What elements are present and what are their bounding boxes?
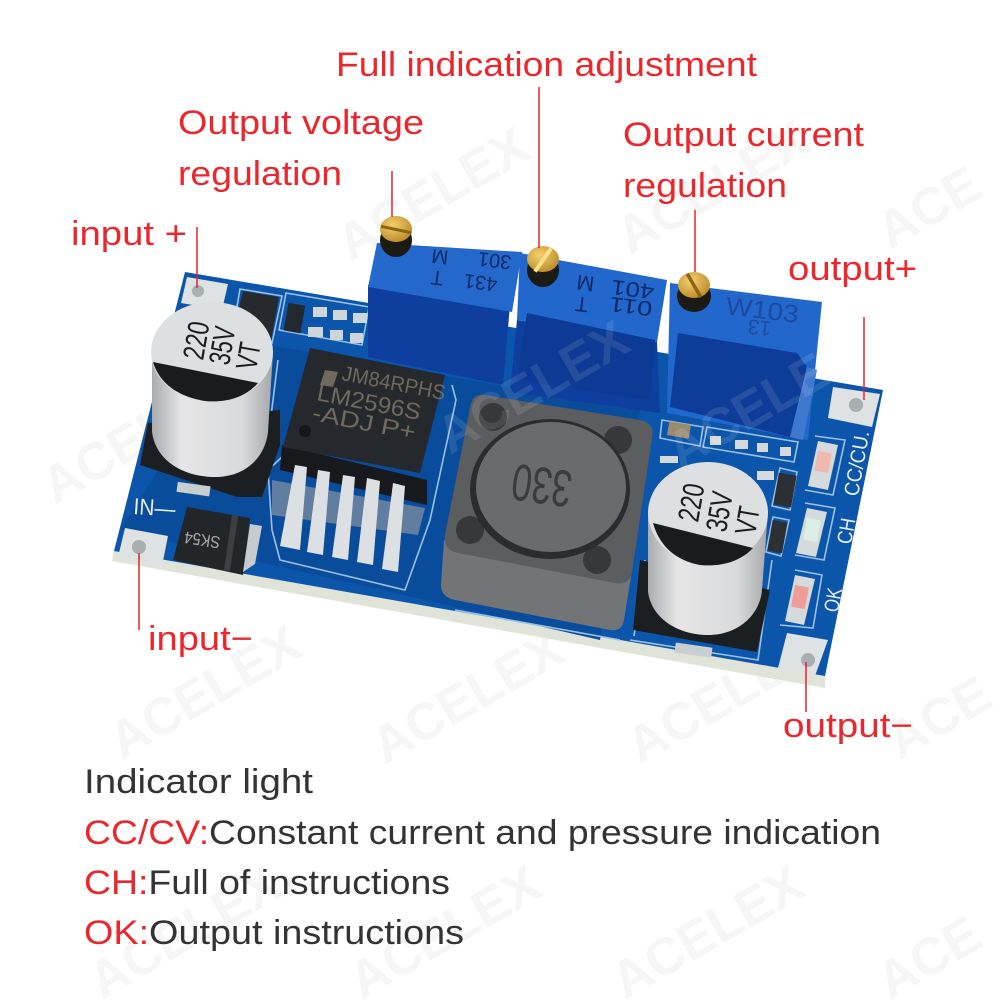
watermarks: ACELEX [617,620,829,775]
left capacitor: VT [230,340,268,372]
watermarks over board [427,310,869,480]
watermarks: ACELEX [327,117,539,272]
label: input + [71,215,197,288]
label: input− [139,553,253,658]
left capacitor: 220 [177,319,216,362]
watermarks: ACELEX [99,615,311,770]
trimmer potentiometer right: W103 [724,292,800,329]
indicator light legend: CC/CV: Constant current and pressure indication [84,814,881,852]
label: Output voltage regulation: regulation [178,155,342,193]
watermarks: ACE [877,665,1000,770]
label: Output current regulation: Output current [623,116,865,154]
indicator light legend: CH:Full of instructions [84,864,450,902]
diode SK54 [173,507,262,575]
trimmer potentiometer left: T [430,266,445,289]
indicator light legend: Indicator light [84,763,314,801]
inductor [441,395,652,630]
trimmer potentiometer left [368,216,522,385]
indicator light legend [84,763,881,952]
circuit board: OK [820,586,847,614]
silkscreen: ++ [791,387,822,413]
label: Output voltage regulation: Output voltage [178,104,424,142]
trimmer potentiometer right: 13 [747,314,773,340]
top-left diode [233,291,279,340]
left capacitor [151,302,273,477]
trimmer potentiometer middle: T [574,291,590,316]
trimmer potentiometer right [667,272,822,440]
inductor: 330 [508,452,576,518]
trimmer potentiometer left: M [430,244,450,268]
label: Output current regulation: regulation [623,167,787,205]
regulator chip LM2596S: -ADJ P+ [310,399,418,445]
watermarks: ACELEX [32,360,244,515]
circuit board: CH [833,516,860,546]
corner pads [118,277,880,676]
regulator chip LM2596S: JM84RPHS [340,362,448,405]
trimmer potentiometer middle: M [575,270,596,295]
left capacitor base [140,410,280,497]
right capacitor: VT [729,504,767,537]
small pads top [284,303,367,343]
circuit board: CC/CU. [840,429,874,498]
watermarks: ACELEX [362,620,574,775]
regulator chip LM2596S: LM2596S [315,379,423,425]
label: input−: input− [148,620,253,658]
trimmer potentiometer left: 431 [463,269,499,295]
indicator light legend: OK:Output instructions [84,914,464,952]
circuit board [112,272,883,688]
label: Output voltage regulation [178,104,424,217]
right capacitor [633,462,770,658]
trimmer potentiometer left: 301 [477,247,513,273]
trimmer potentiometer middle: 401 [610,275,656,303]
board outlines [232,289,845,660]
trimmer potentiometer middle: 011 [608,292,654,320]
circuit board: IN— [133,493,176,522]
label: input +: input + [71,215,187,253]
watermarks over board: ACELEX [427,310,639,465]
label: output−: output− [783,707,913,745]
trimmer potentiometer middle [510,246,667,413]
right capacitor: 220 [672,481,711,524]
left capacitor: 35V [203,324,242,367]
LEDs [785,441,838,625]
watermarks over board: ACELEX [657,325,869,480]
label: Output current regulation [623,116,865,272]
label: Full indication adjustment: Full indication adjustment [336,46,758,84]
watermarks: ACE [867,155,991,260]
watermarks: ACELEX [607,110,819,265]
small SMD row [660,421,797,553]
regulator chip LM2596S [272,348,448,572]
label: output+: output+ [788,250,917,288]
right capacitor: 35V [700,489,740,534]
diode SK54: SK54 [183,527,222,552]
label: output− [783,662,913,745]
